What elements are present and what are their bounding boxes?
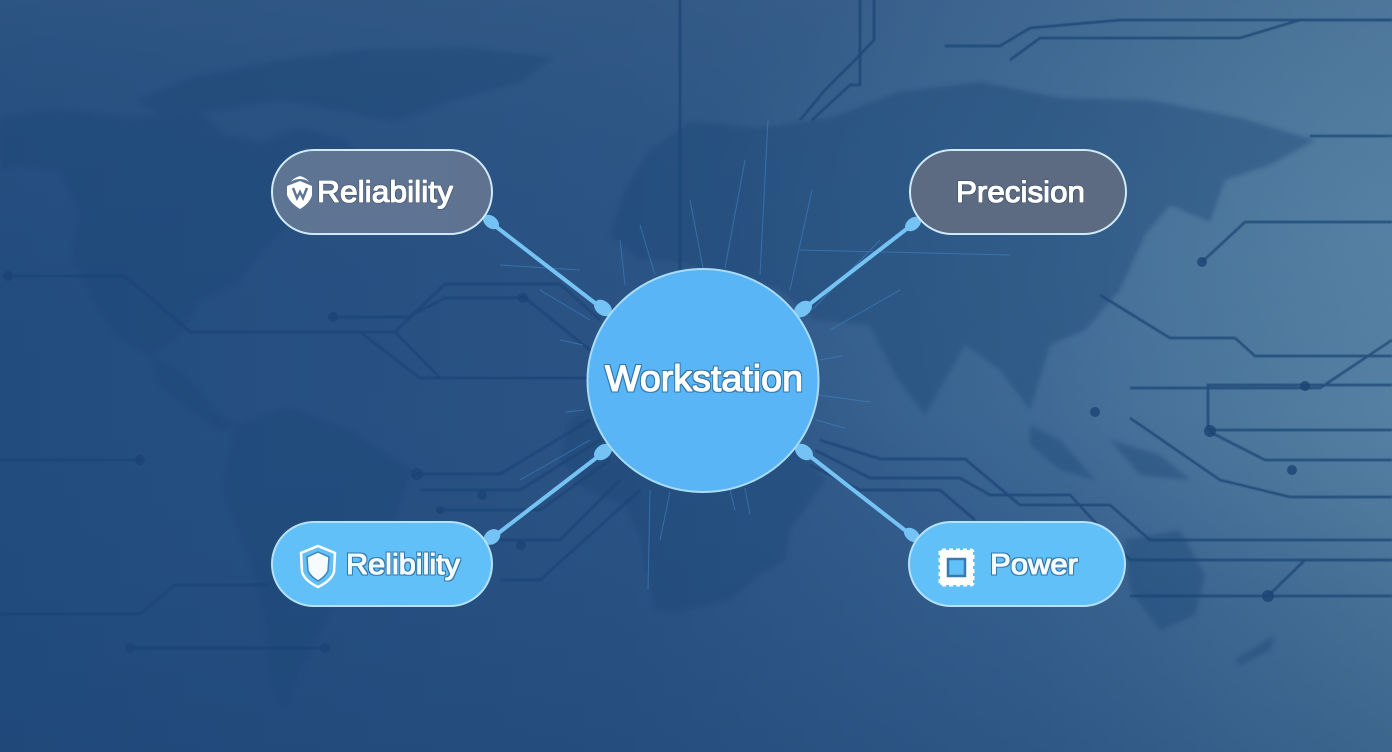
Madagascar [765,515,792,572]
Central America [150,355,235,432]
central hub: Workstation: Workstation [605,358,803,399]
pill: Relibility (bottom left) [272,522,492,606]
icon: shield [301,546,335,587]
icon: chip [940,550,973,585]
pill: Power (bottom right) [909,522,1125,606]
label: Relibility: Relibility [346,549,461,581]
connector: bottom left [481,440,615,548]
label: Reliability: Reliability [317,174,453,209]
label: Precision: Precision [956,176,1085,209]
connector: top right [791,214,924,321]
South America [222,408,412,708]
Africa [560,380,825,612]
connector: bottom right [792,440,923,545]
Southeast Asia islands [1030,425,1190,480]
pill: Precision (top right) [910,150,1126,234]
North America [0,110,370,355]
pill: Reliability (top left) [272,150,492,234]
circuit nodes [3,257,1310,653]
central hub: Workstation [588,269,818,492]
Asia darker core [760,100,1290,340]
radial thin lines around hub [500,120,1010,590]
connector: top left [480,212,615,320]
icon: shield with W [287,176,312,209]
label: Power: Power [990,549,1078,581]
Japan [1190,175,1220,220]
Europe and Asia [610,82,1315,415]
Australia [1125,530,1205,630]
Greenland and arctic islands [138,48,552,122]
